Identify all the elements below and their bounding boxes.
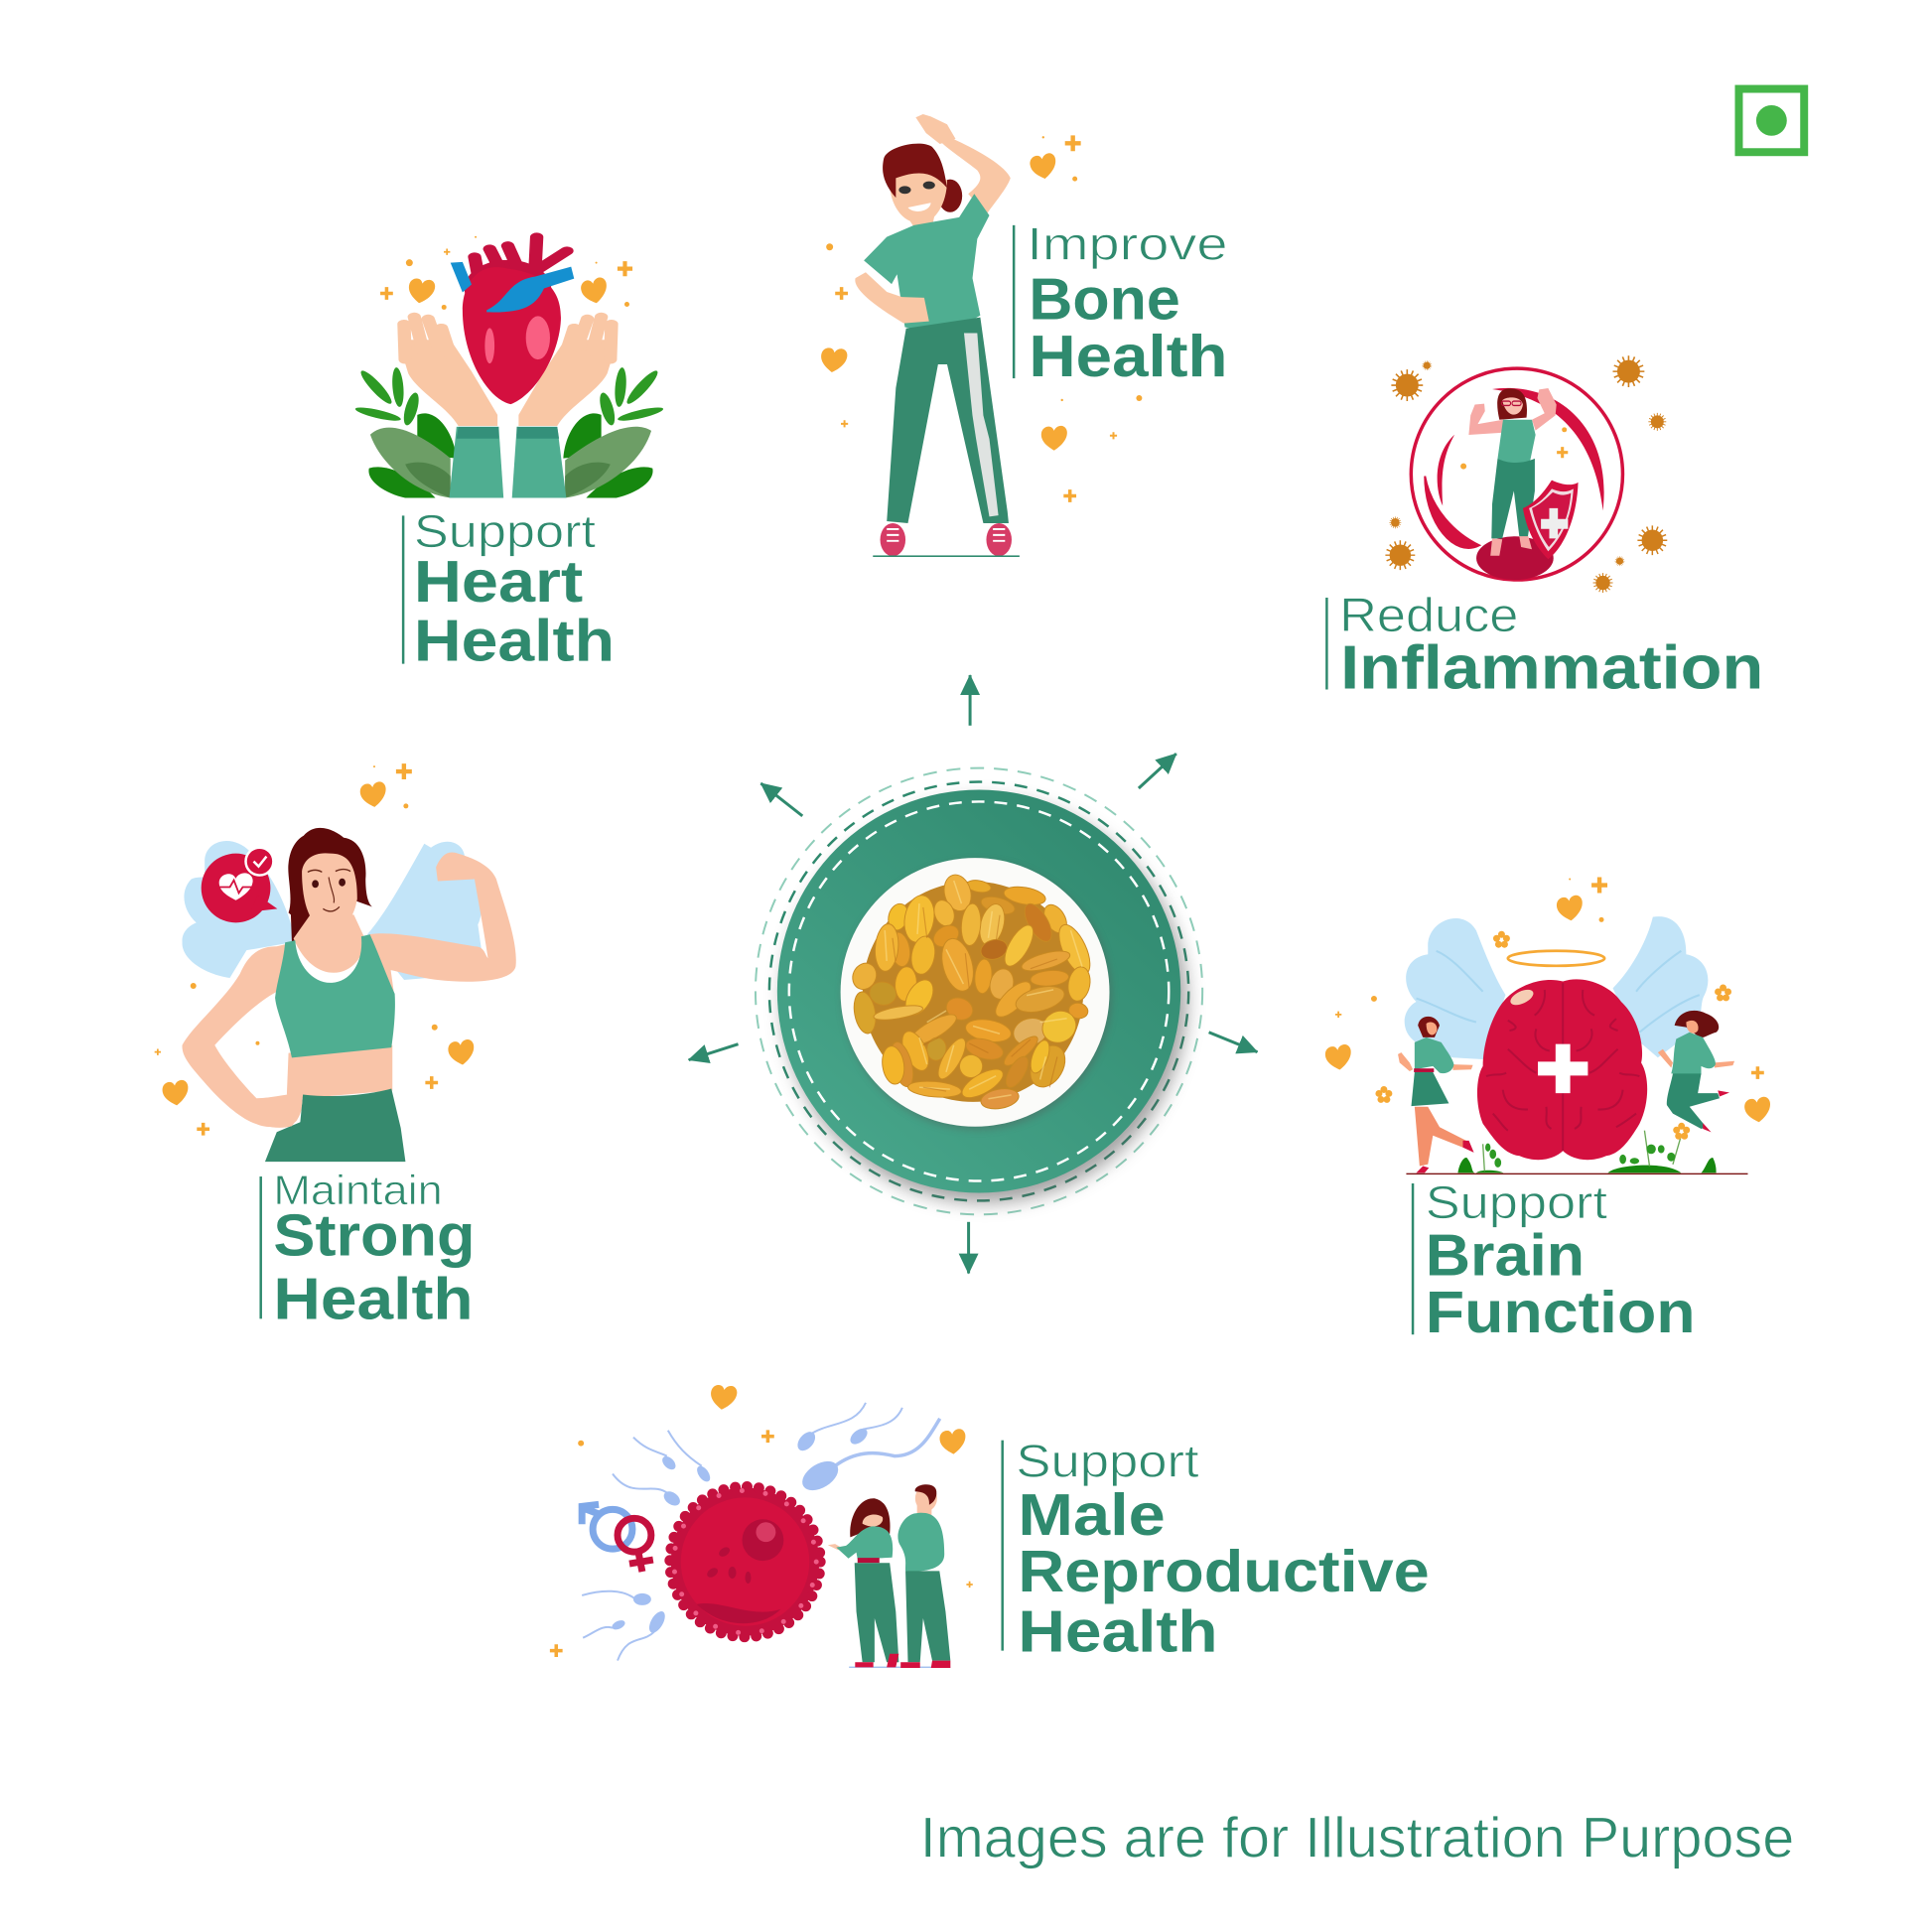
arrow: down: [967, 1222, 970, 1274]
wings: [1405, 916, 1708, 1059]
label bar: [1412, 1183, 1414, 1334]
arrow: north east: [1139, 754, 1176, 788]
left girl: [1398, 1017, 1474, 1173]
arrows radiating from the bowl: [689, 675, 1257, 1274]
panel: reduce inflammation: [1325, 355, 1763, 703]
panel: support heart health: [353, 236, 665, 674]
panel: improve bone health: [819, 114, 1228, 557]
center: raisin bowl plate: [756, 768, 1202, 1214]
label text: [273, 1167, 476, 1331]
label text: Inflammation: [1340, 634, 1763, 703]
man: [897, 1484, 950, 1668]
footnote: Images are for Illustration Purpose: [920, 1807, 1794, 1870]
label text: Support: [414, 505, 596, 557]
label text: Male: [1018, 1481, 1166, 1548]
label text: Strong: [273, 1202, 476, 1269]
label text: Health: [273, 1265, 474, 1331]
label bar: [259, 1176, 262, 1318]
label text: Heart: [414, 548, 583, 615]
label bar: [402, 515, 404, 664]
label text: Bone: [1029, 265, 1180, 332]
label text: Reduce: [1339, 590, 1518, 642]
heart: [465, 260, 551, 317]
right girl: [1658, 1011, 1734, 1132]
label text: Health: [1029, 323, 1228, 389]
illustration: woman with shield in a ring: [1411, 368, 1622, 580]
icon: vegetarian mark: [1738, 89, 1804, 152]
label text: Improve: [1027, 218, 1228, 270]
label text: Support: [1016, 1436, 1199, 1487]
illustration: winged brain: [1398, 916, 1747, 1174]
icon: gender symbols: [582, 1504, 653, 1572]
label text: Health: [414, 608, 615, 674]
arrow: east: [1209, 1033, 1257, 1052]
label text: [1027, 218, 1228, 389]
label bar: [1325, 598, 1328, 690]
illustration: couple: [828, 1484, 950, 1668]
illustration: egg cell: [670, 1486, 820, 1637]
decorations: hearts and sparkles: [380, 236, 632, 310]
ground and plants: [1406, 1173, 1747, 1174]
hands: [398, 340, 497, 426]
illustration: stretching woman: [855, 114, 1020, 557]
label text: [1339, 590, 1763, 703]
decorations: hearts and sparkles: [550, 1383, 973, 1657]
label text: Function: [1426, 1279, 1696, 1345]
decorations: hearts and sparkles: [155, 763, 476, 1136]
arrow: up: [969, 675, 972, 726]
icon: viruses: [1385, 355, 1667, 593]
illustration: hands holding a heart: [353, 237, 665, 497]
label text: Health: [1018, 1598, 1218, 1665]
brain: [1477, 979, 1647, 1160]
decorations: hearts and sparkles: [819, 135, 1142, 502]
panel: maintain strong health: [155, 763, 516, 1331]
illustration: sperm cells: [582, 1403, 940, 1661]
wings: [182, 841, 483, 980]
woman: [828, 1498, 898, 1667]
leaf sprigs: [353, 367, 665, 426]
label text: Support: [1426, 1176, 1607, 1228]
label bar: [1001, 1441, 1004, 1651]
label text: [414, 505, 615, 674]
label text: [1016, 1436, 1430, 1665]
label bar: [1013, 225, 1015, 378]
decorations: hearts and sparkles: [1324, 878, 1772, 1124]
raisins: [849, 872, 1096, 1112]
label text: Reproductive: [1018, 1538, 1430, 1604]
arrow: west: [689, 1044, 739, 1060]
label text: Brain: [1426, 1222, 1585, 1289]
label text: [1426, 1176, 1696, 1345]
label text: Maintain: [273, 1167, 443, 1213]
panel: support male reproductive health: [550, 1383, 1430, 1668]
icon: heart-rate speech bubble: [202, 848, 277, 922]
illustration: flexing woman: [182, 828, 516, 1162]
arrow: north west: [760, 783, 802, 816]
panel: support brain function: [1324, 878, 1772, 1345]
icons: orange flowers: [1375, 931, 1731, 1140]
